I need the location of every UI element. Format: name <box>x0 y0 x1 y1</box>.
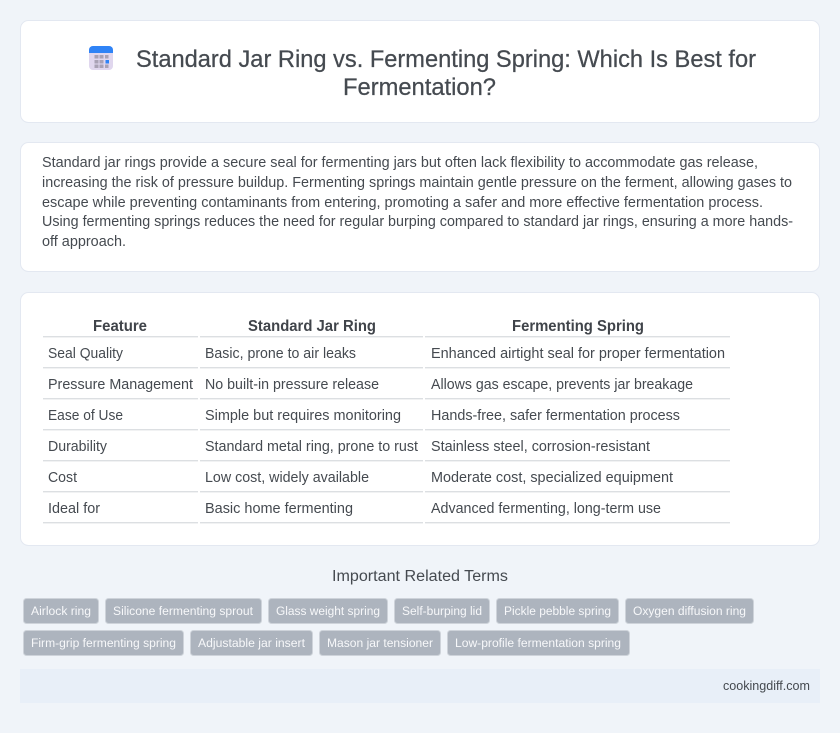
chip: Glass weight spring <box>276 604 380 618</box>
table row: cost: Cost <box>48 470 77 486</box>
chip: Oxygen diffusion ring <box>633 604 746 618</box>
title: Fermentation? <box>343 74 496 101</box>
panel: header <box>20 20 820 122</box>
table row: ease of use: Ease of Use <box>48 408 123 424</box>
table row: pressure management <box>43 377 730 399</box>
chip <box>24 598 98 624</box>
chip: Self-burping lid <box>402 604 482 618</box>
table row: pressure management: Pressure Management <box>48 377 193 393</box>
text block: summary: Standard jar rings provide a secure seal for fermenting jars but often lack flexibility to accommodate gas release, <box>42 155 758 171</box>
table header row: Standard Jar Ring <box>248 318 376 335</box>
table row: seal quality: Basic, prone to air leaks <box>205 346 356 362</box>
chip <box>190 630 312 656</box>
chip <box>496 598 618 624</box>
chip <box>626 598 754 624</box>
table row: durability: Standard metal ring, prone to rust <box>205 439 418 455</box>
chip: Pickle pebble spring <box>504 604 611 618</box>
table row: seal quality <box>43 346 730 368</box>
chip: Mason jar tensioner <box>327 636 433 650</box>
table row: ease of use: Hands-free, safer fermentation process <box>431 408 680 424</box>
panel: comparison table <box>20 292 820 546</box>
title <box>136 46 756 101</box>
chip <box>320 630 440 656</box>
text block: summary: escape while preventing contaminants from entering, promoting a safer and more effective fermentation process. <box>42 195 763 211</box>
panel: intro text <box>20 142 820 272</box>
related terms chips <box>24 598 754 656</box>
table row: ideal for: Advanced fermenting, long-term use <box>431 501 661 517</box>
chip: Firm-grip fermenting spring <box>31 636 176 650</box>
table row: pressure management: Allows gas escape, prevents jar breakage <box>431 377 693 393</box>
table header row <box>43 318 730 337</box>
chip <box>394 598 490 624</box>
table row: ideal for: Ideal for <box>48 501 100 517</box>
text block: summary: Using fermenting springs reduces the need for regular burping compared to standard jar rings, ensuring a more hands- <box>42 214 793 230</box>
table row: durability: Stainless steel, corrosion-resistant <box>431 439 650 455</box>
chip: Low-profile fermentation spring <box>455 636 621 650</box>
table row: ease of use: Simple but requires monitoring <box>205 408 401 424</box>
table row: seal quality: Enhanced airtight seal for proper fermentation <box>431 346 725 362</box>
text block: summary <box>42 155 793 250</box>
text block: summary: increasing the risk of pressure buildup. Fermenting springs maintain gentle pressure on the ferment, allowing gases to <box>42 175 792 191</box>
chip <box>24 630 184 656</box>
table header row: Fermenting Spring <box>512 318 644 335</box>
text block: summary: off approach. <box>42 234 126 250</box>
table row: ideal for: Basic home fermenting <box>205 501 353 517</box>
table row: seal quality: Seal Quality <box>48 346 124 362</box>
table row: cost <box>43 470 730 492</box>
chip <box>106 598 262 624</box>
table header row: Feature <box>93 318 147 335</box>
chip <box>448 630 630 656</box>
table row: ideal for <box>43 501 730 523</box>
footer source: cookingdiff.com <box>723 679 810 693</box>
chip: Silicone fermenting sprout <box>113 604 254 618</box>
table row: cost: Low cost, widely available <box>205 470 369 486</box>
footer bar <box>20 669 820 703</box>
chip: Adjustable jar insert <box>198 636 306 650</box>
table row: durability <box>43 439 730 461</box>
icon: calendar abacus <box>89 46 113 70</box>
heading: important related terms: Important Related Terms <box>332 568 508 585</box>
chip <box>268 598 388 624</box>
table row: durability: Durability <box>48 439 108 455</box>
title: Standard Jar Ring vs. Fermenting Spring: Which Is Best for <box>136 46 756 73</box>
chip: Airlock ring <box>31 604 91 618</box>
table row: ease of use <box>43 408 730 430</box>
table row: cost: Moderate cost, specialized equipment <box>431 470 673 486</box>
table row: pressure management: No built-in pressure release <box>205 377 379 393</box>
